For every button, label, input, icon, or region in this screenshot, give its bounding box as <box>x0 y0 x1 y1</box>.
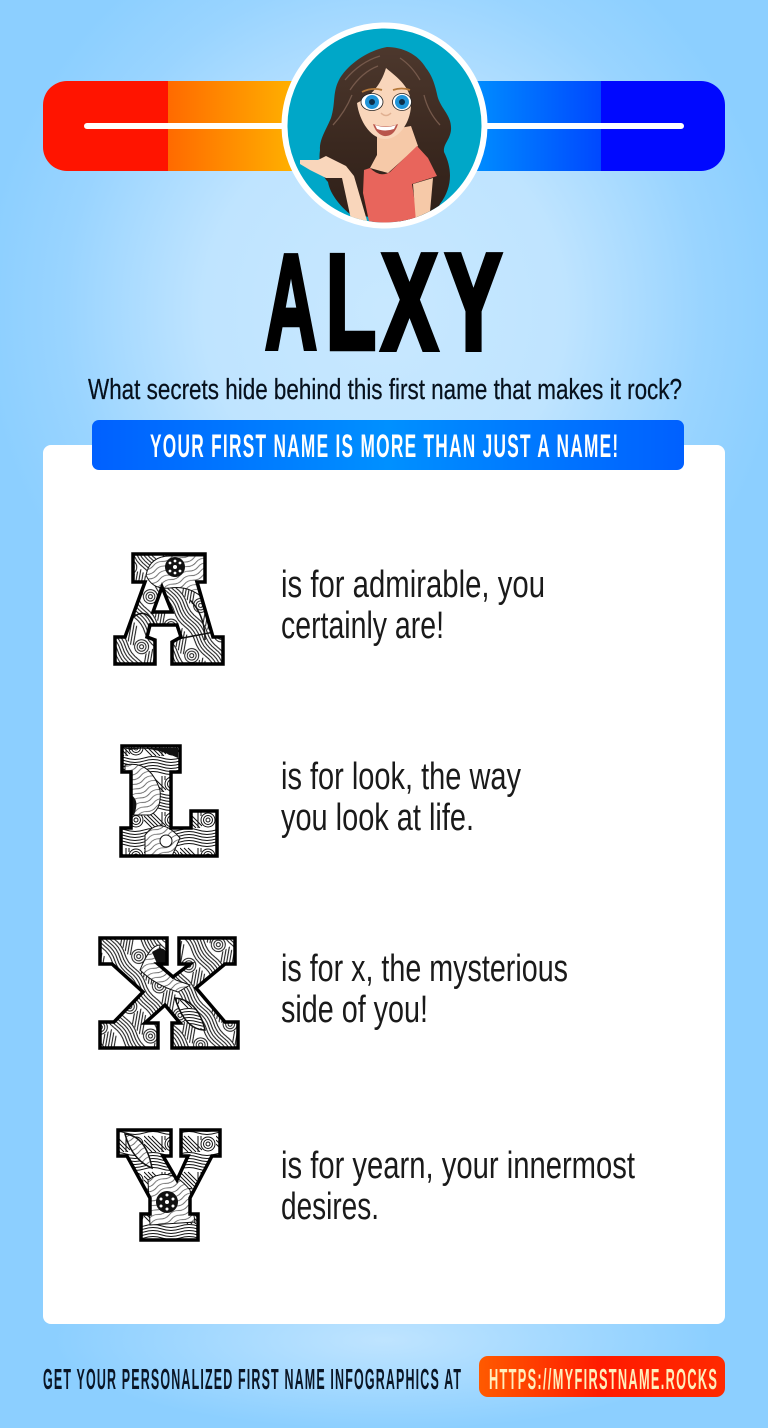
text: L meaning: you look at life. <box>281 797 474 839</box>
banner: YOUR FIRST NAME IS MORE THAN JUST A NAME! <box>150 430 618 464</box>
eyes <box>361 88 412 110</box>
icon: patterned letter L <box>121 746 217 856</box>
banner <box>92 420 684 470</box>
text: A meaning: is for admirable, you <box>281 564 545 606</box>
text: X meaning <box>281 948 568 1031</box>
header colour bar <box>43 81 725 171</box>
footer url button: HTTPS://MYFIRSTNAME.ROCKS <box>489 1363 717 1395</box>
text: Y meaning: is for yearn, your innermost <box>281 1145 635 1187</box>
main white panel <box>43 445 725 1324</box>
mouth <box>373 124 398 136</box>
left arm and hand <box>300 156 368 224</box>
title: X <box>382 226 437 378</box>
title: L <box>326 226 376 378</box>
text: Y meaning <box>281 1145 635 1228</box>
face <box>357 68 411 139</box>
nose <box>381 113 391 116</box>
footer call to action: GET YOUR PERSONALIZED FIRST NAME INFOGRAPHICS AT <box>43 1363 461 1395</box>
title: A <box>265 226 317 378</box>
text: X meaning: is for x, the mysterious <box>281 948 568 990</box>
header white line <box>84 123 684 129</box>
icon: patterned letter X <box>100 938 238 1048</box>
text: A meaning: certainly are! <box>281 605 444 647</box>
text: A meaning <box>281 564 545 647</box>
title: Y <box>446 226 501 378</box>
text: X meaning: side of you! <box>281 989 428 1031</box>
letter Y row <box>118 1130 635 1240</box>
neck and chest <box>370 126 418 173</box>
text: Y meaning: desires. <box>281 1186 379 1228</box>
shirt <box>363 146 437 226</box>
letter L row <box>121 746 521 856</box>
icon: patterned letter Y <box>118 1130 220 1240</box>
text: L meaning: is for look, the way <box>281 756 521 798</box>
icon: patterned letter A <box>115 554 225 664</box>
right arm <box>413 178 433 218</box>
letter A row <box>115 554 545 664</box>
hair <box>319 47 451 226</box>
letter X row <box>100 938 568 1048</box>
title <box>265 226 501 378</box>
avatar portrait <box>284 26 484 226</box>
text: L meaning <box>281 756 521 839</box>
